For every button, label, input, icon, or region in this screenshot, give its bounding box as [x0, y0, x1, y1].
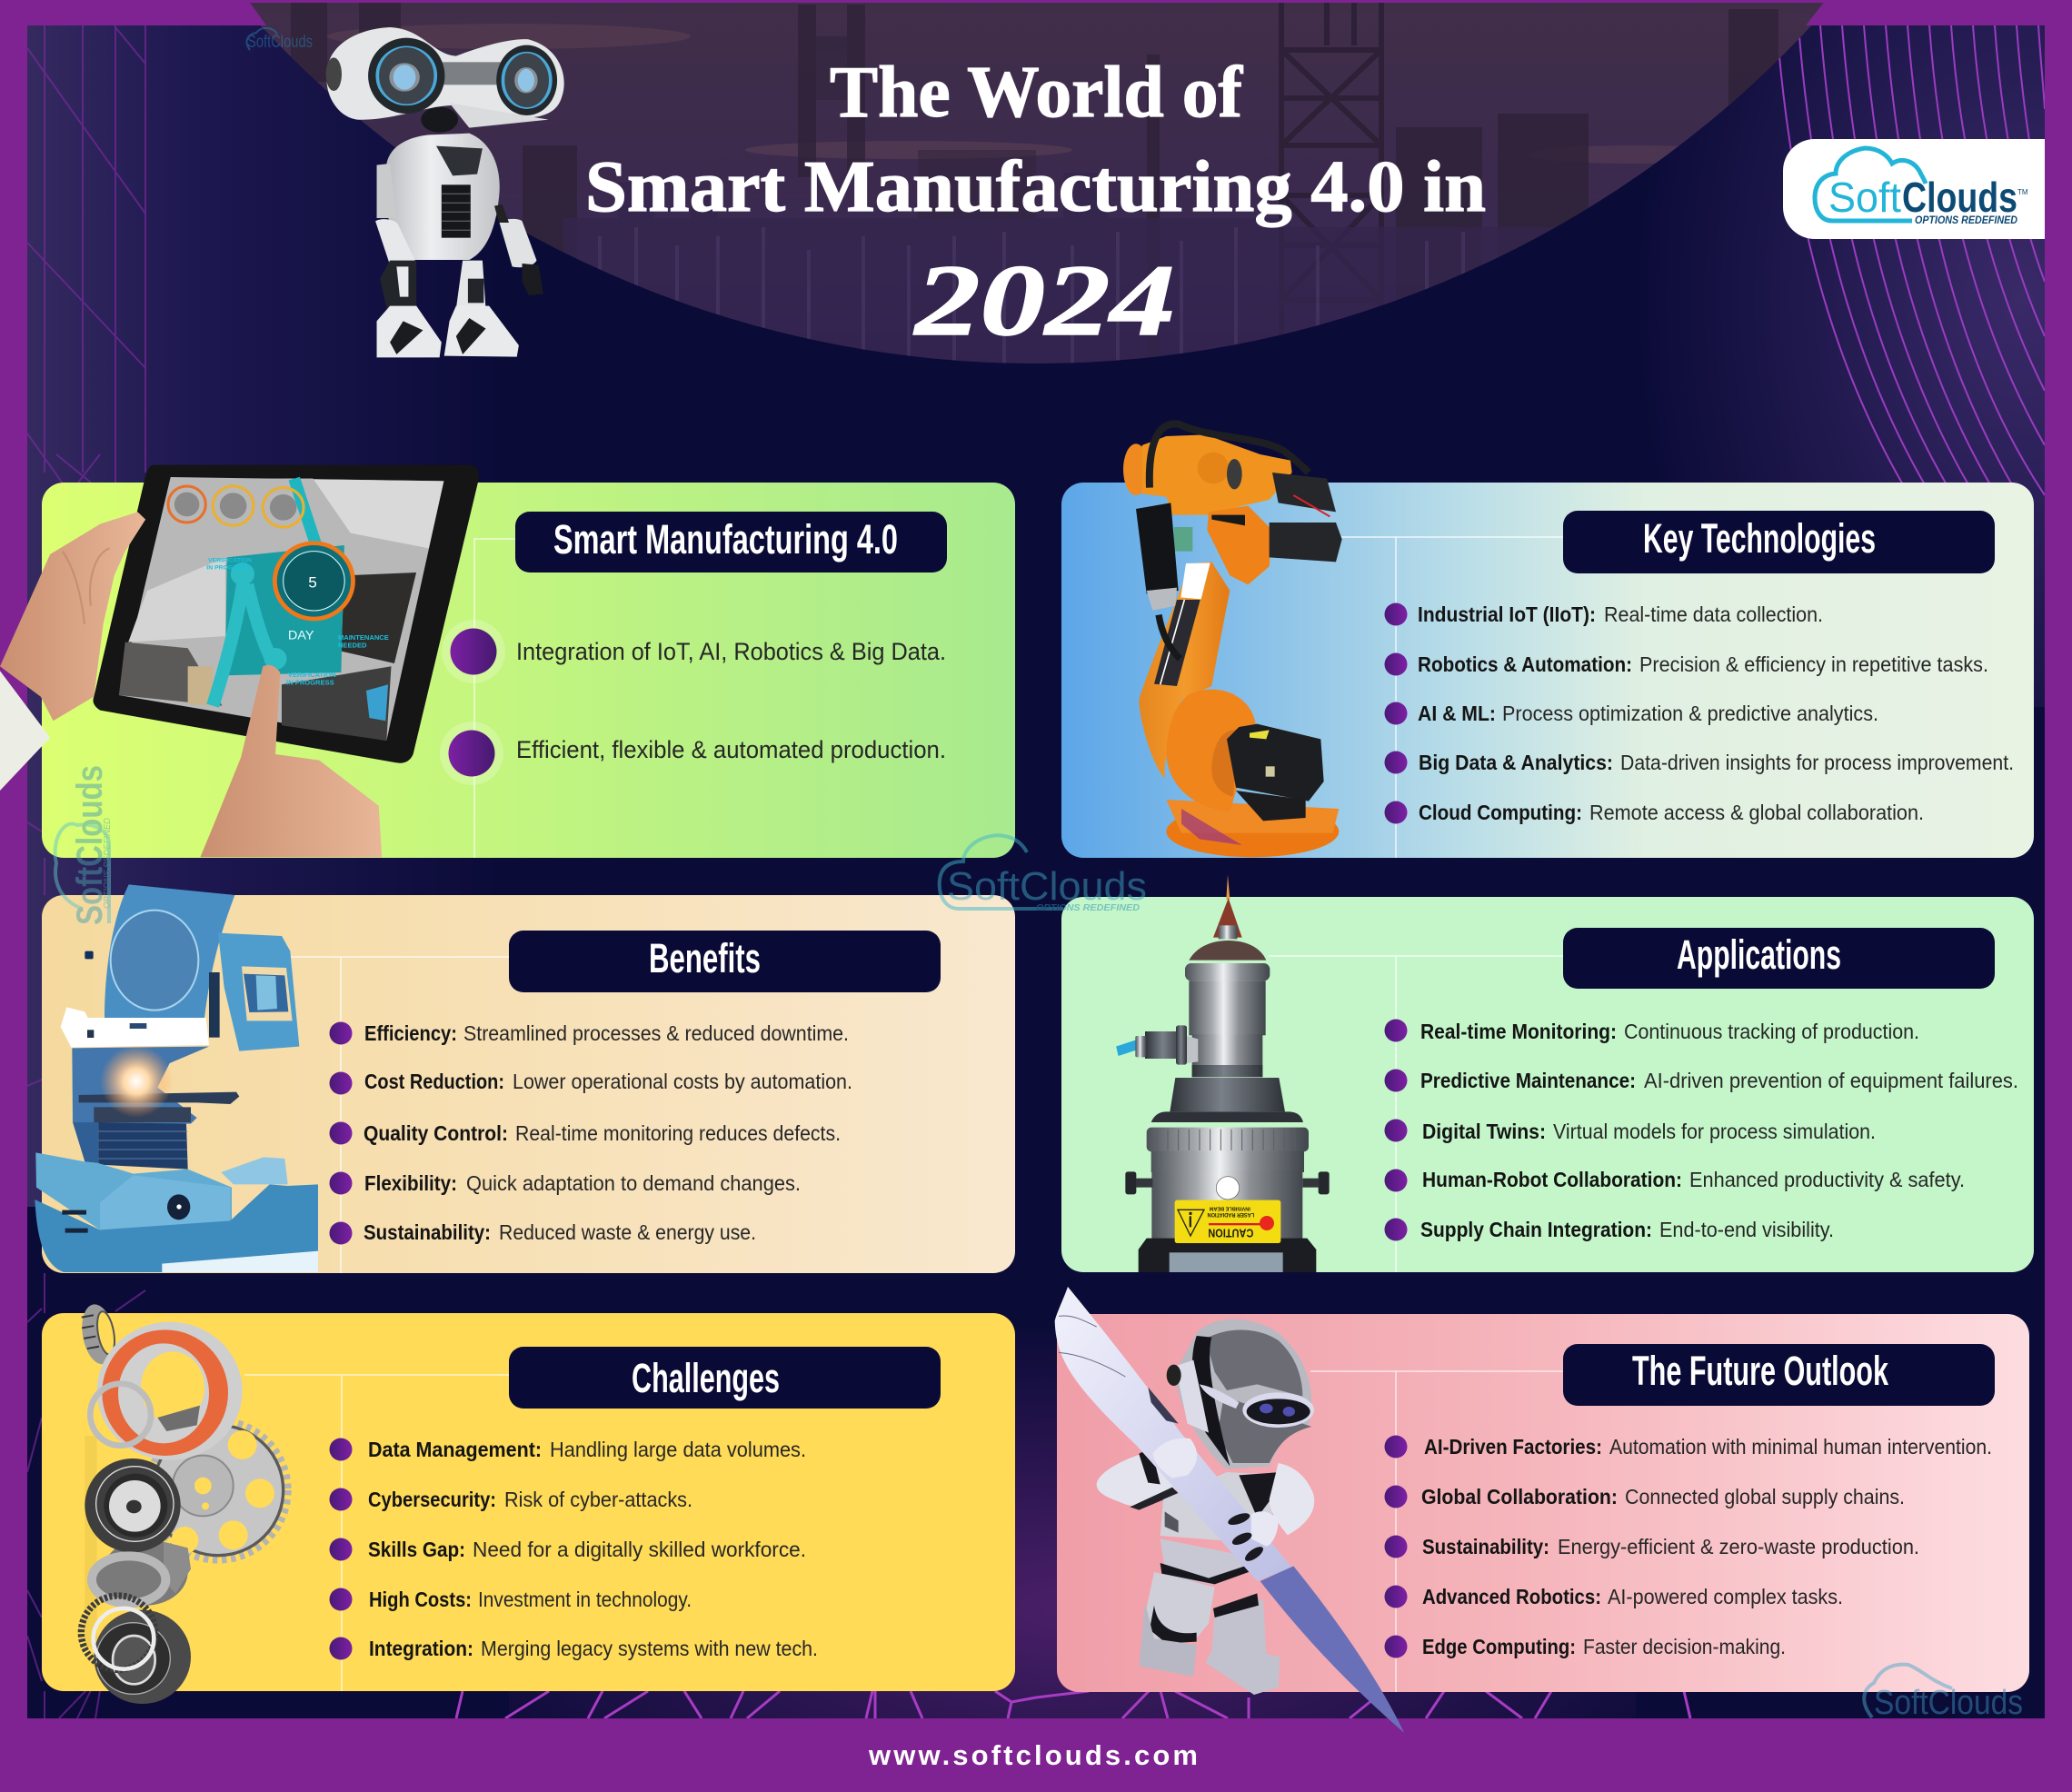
list: applications: AI-driven prevention of equipment failures. [1644, 1069, 2018, 1092]
list: applications: Digital Twins: [1422, 1120, 1546, 1143]
watermark: left vertical: SoftClouds [70, 765, 110, 925]
watermark: top left: SoftClouds [247, 33, 313, 52]
title: 2024 [912, 244, 1175, 357]
title [585, 53, 1486, 357]
list: applications: Virtual models for process simulation. [1553, 1120, 1876, 1143]
illustration: hands with tablet: VERIFICATION [208, 557, 252, 563]
list: challenges: Data Management: [368, 1438, 542, 1461]
list: applications: End-to-end visibility. [1659, 1218, 1834, 1241]
illustration: robot holding giant pen [1055, 1287, 1404, 1733]
list: key technologies: Robotics & Automation: [1418, 652, 1632, 676]
watermark: centre: OPTIONS REDEFINED [1036, 903, 1140, 913]
list: future outlook: Edge Computing: [1422, 1635, 1576, 1658]
heading pill [509, 931, 941, 992]
list: key technologies: AI & ML: [1418, 702, 1496, 725]
illustration: white robot [326, 27, 564, 357]
watermark: centre: SoftClouds [947, 864, 1147, 909]
watermark: top left [246, 28, 313, 52]
list: key technologies: Remote access & global collaboration. [1589, 801, 1924, 824]
title: Smart Manufacturing 4.0 in [585, 147, 1486, 227]
list: challenges: Handling large data volumes. [550, 1438, 806, 1461]
icon: cloud outline [1815, 148, 1926, 221]
bullet: integration: Integration of IoT, AI, Robotics & Big Data. [516, 638, 946, 665]
illustration: laser head: CAUTION [1208, 1227, 1253, 1239]
list: benefits: Sustainability: [364, 1220, 491, 1244]
list: key technologies: Precision & efficiency in repetitive tasks. [1639, 652, 1988, 676]
heading pill: Benefits [649, 935, 761, 981]
illustration: laser head: INVISIBLE BEAM [1209, 1205, 1250, 1210]
illustration: hands with tablet: NEEDED [338, 642, 367, 650]
illustration: hands with tablet: DAY [288, 629, 314, 642]
list: applications: Enhanced productivity & safety. [1689, 1168, 1965, 1191]
list: challenges: Risk of cyber-attacks. [504, 1488, 692, 1511]
panel: Benefits [35, 884, 1015, 1273]
heading pill [1563, 1344, 1995, 1406]
list: benefits: Streamlined processes & reduced downtime. [463, 1021, 849, 1045]
list: benefits: Reduced waste & energy use. [499, 1220, 756, 1244]
list: benefits: Flexibility: [364, 1171, 457, 1195]
logo: SoftClouds: Clouds [1902, 174, 2017, 221]
illustration: hands with tablet [0, 465, 479, 857]
panel: Key Technologies [1061, 423, 2034, 858]
footer url: www.softclouds.com [868, 1739, 1198, 1771]
list: future outlook: Connected global supply chains. [1625, 1485, 1905, 1508]
list: future outlook: Global Collaboration: [1421, 1485, 1618, 1508]
header photo dome: refinery skyline [250, 3, 1823, 363]
list: challenges: Need for a digitally skilled workforce. [473, 1538, 806, 1561]
watermark: bottom right: SoftClouds [1874, 1684, 2023, 1722]
illustration: hands with tablet: IN PROGRESS [206, 565, 251, 572]
list: challenges: Integration: [369, 1637, 473, 1660]
heading pill: Key Technologies [1643, 515, 1876, 562]
list: key technologies: Cloud Computing: [1419, 801, 1582, 824]
list: future outlook: Advanced Robotics: [1422, 1585, 1601, 1608]
list: applications [1385, 1020, 2018, 1241]
list: challenges: Merging legacy systems with new tech. [481, 1637, 818, 1660]
heading pill [1563, 511, 1995, 573]
bullet: efficient: Efficient, flexible & automated production. [516, 736, 946, 763]
list: future outlook: Sustainability: [1422, 1535, 1549, 1558]
list: key technologies: Real-time data collection. [1604, 602, 1823, 626]
bullet: integration [442, 620, 946, 683]
heading pill [515, 512, 947, 572]
illustration: gears and bearings [77, 1301, 287, 1704]
watermark: bottom right [1864, 1665, 2023, 1722]
heading pill [1563, 928, 1995, 989]
panel: Challenges [42, 1301, 1015, 1704]
illustration: blue measuring machine [35, 884, 318, 1272]
panel: The Future Outlook [1055, 1287, 2029, 1733]
list: benefits: Real-time monitoring reduces defects. [515, 1121, 841, 1145]
panel: Applications [1061, 875, 2034, 1272]
illustration: laser head: LASER RADIATION [1207, 1211, 1254, 1217]
list: key technologies: Data-driven insights for process improvement. [1620, 751, 2014, 774]
heading pill: Smart Manufacturing 4.0 [553, 516, 898, 562]
list: key technologies: Process optimization & predictive analytics. [1502, 702, 1878, 725]
list: future outlook: Faster decision-making. [1583, 1635, 1786, 1658]
illustration: hands with tablet: IN PROGRESS [286, 678, 334, 686]
heading pill [509, 1347, 941, 1409]
title: The World of [830, 53, 1243, 133]
illustration: hands with tablet: MAINTENANCE [338, 633, 389, 642]
list: key technologies: Big Data & Analytics: [1419, 751, 1613, 774]
list: benefits: Efficiency: [364, 1021, 457, 1045]
list: benefits [329, 1021, 852, 1245]
logo: SoftClouds [1783, 139, 2045, 239]
bullet: efficient [440, 722, 946, 785]
list: applications: Continuous tracking of production. [1624, 1020, 1919, 1043]
list: applications: Predictive Maintenance: [1420, 1069, 1636, 1092]
list: benefits: Quality Control: [364, 1121, 508, 1145]
list: future outlook: Automation with minimal human intervention. [1609, 1435, 1992, 1458]
list: benefits: Quick adaptation to demand changes. [466, 1171, 801, 1195]
list: challenges [329, 1438, 818, 1660]
heading pill: The Future Outlook [1632, 1348, 1889, 1394]
list: future outlook: AI-powered complex tasks. [1608, 1585, 1843, 1608]
watermark: centre [940, 835, 1147, 913]
list: challenges: Investment in technology. [478, 1588, 692, 1611]
list: challenges: Skills Gap: [368, 1538, 465, 1561]
watermark: left vertical: OPTIONS REDEFINED [103, 818, 113, 909]
list: key technologies: Industrial IoT (IIoT): [1418, 602, 1596, 626]
list: future outlook: AI-Driven Factories: [1424, 1435, 1602, 1458]
panel: Smart Manufacturing 4.0 [0, 465, 1015, 858]
logo: SoftClouds: TM [2017, 188, 2028, 196]
heading pill: Challenges [632, 1355, 780, 1401]
list: applications: Supply Chain Integration: [1420, 1218, 1652, 1241]
list: benefits: Cost Reduction: [364, 1070, 504, 1093]
illustration: laser head [1117, 875, 1330, 1272]
illustration: orange robotic arm [1123, 423, 1342, 857]
logo: SoftClouds: OPTIONS REDEFINED [1915, 214, 2017, 226]
watermark: left vertical [55, 765, 113, 925]
illustration: hands with tablet: 5 [308, 574, 317, 592]
list: benefits: Lower operational costs by automation. [513, 1070, 852, 1093]
heading pill: Applications [1677, 931, 1841, 978]
illustration: hands with tablet: VERIFICATION [288, 671, 336, 679]
list: future outlook [1385, 1435, 1992, 1658]
logo: SoftClouds: Soft [1828, 174, 1901, 221]
list: future outlook: Energy-efficient & zero-waste production. [1558, 1535, 1919, 1558]
list: applications: Real-time Monitoring: [1420, 1020, 1617, 1043]
list: challenges: Cybersecurity: [368, 1488, 496, 1511]
list: applications: Human-Robot Collaboration: [1422, 1168, 1682, 1191]
list: challenges: High Costs: [369, 1588, 472, 1611]
list: key technologies [1385, 602, 2014, 824]
